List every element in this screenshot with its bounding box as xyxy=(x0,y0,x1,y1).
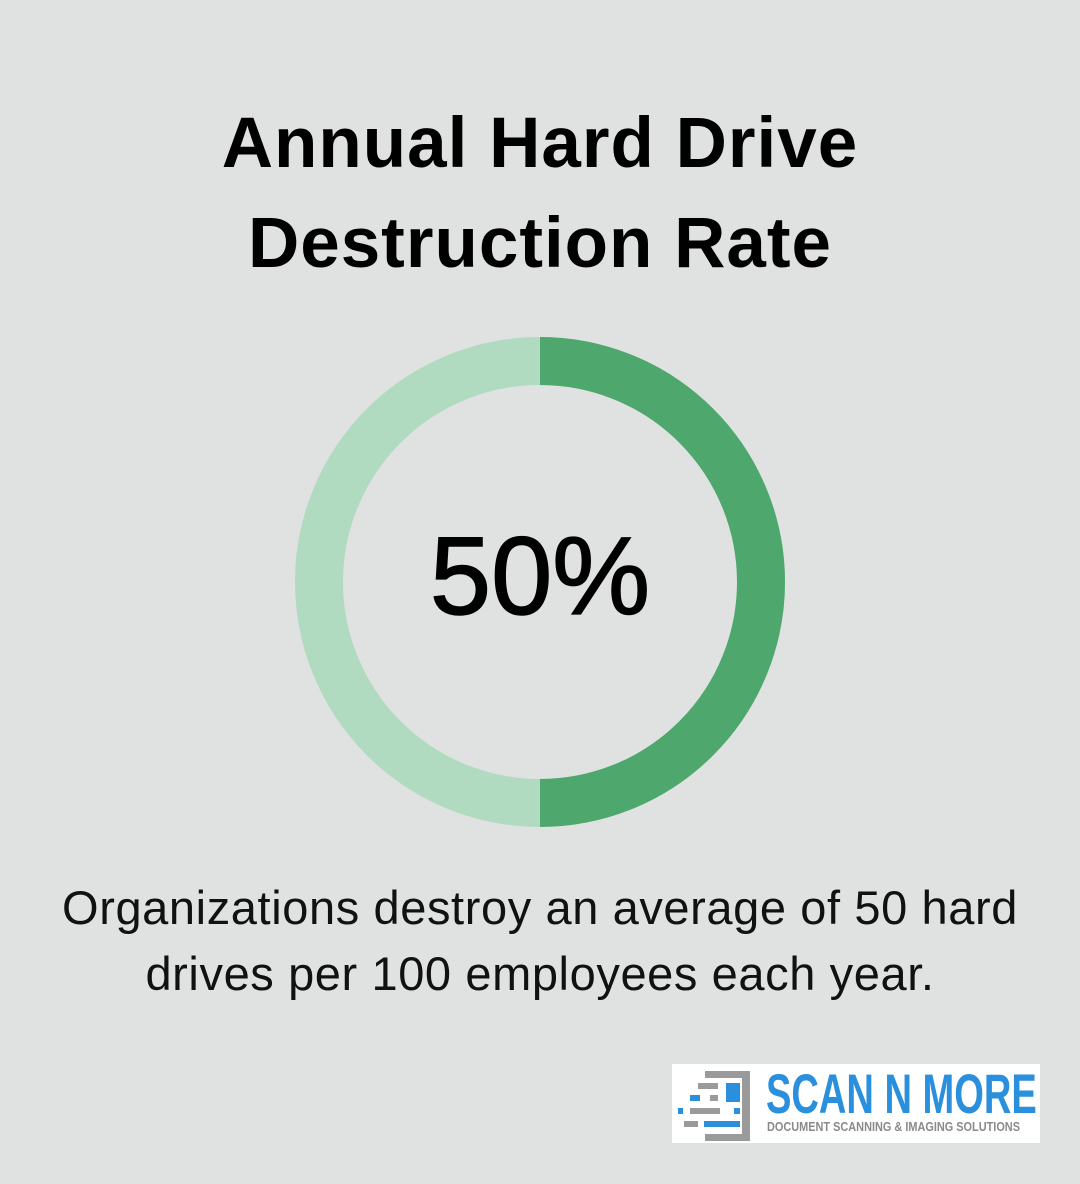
description text xyxy=(62,881,1018,1000)
chart: 50% arc xyxy=(540,361,761,803)
description text: Organizations destroy an average of 50 hard xyxy=(62,881,1018,934)
title: Destruction Rate xyxy=(248,204,832,283)
logo: DOCUMENT SCANNING & IMAGING SOLUTIONS xyxy=(767,1119,1020,1134)
title xyxy=(222,104,858,283)
chart: value label: 50% xyxy=(430,515,650,638)
logo icon xyxy=(678,1071,750,1141)
logo xyxy=(672,1064,1040,1143)
title: Annual Hard Drive xyxy=(222,104,858,183)
description text: drives per 100 employees each year. xyxy=(145,947,935,1000)
chart: background ring xyxy=(319,361,761,803)
